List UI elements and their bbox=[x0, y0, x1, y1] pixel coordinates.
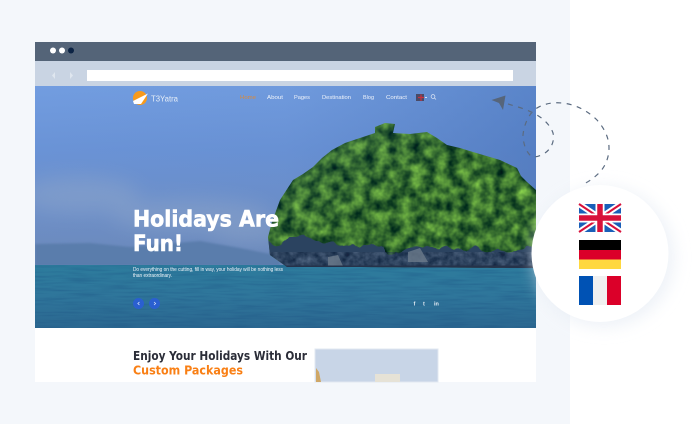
social icons: t bbox=[423, 302, 425, 308]
section heading: Custom Packages bbox=[133, 364, 243, 378]
island bbox=[268, 123, 536, 268]
browser window bbox=[20, 42, 540, 382]
flag: United Kingdom bbox=[579, 204, 621, 232]
nav links: Blog bbox=[363, 95, 374, 101]
social icons: f bbox=[414, 302, 416, 308]
paper plane icon bbox=[492, 96, 506, 110]
content section bbox=[35, 328, 536, 382]
social icons bbox=[414, 302, 439, 306]
browser address bar bbox=[35, 61, 536, 86]
nav links: Home bbox=[240, 95, 256, 101]
sea bbox=[35, 265, 536, 328]
section image bbox=[315, 349, 438, 382]
logo bbox=[133, 91, 179, 105]
dashed flight path bbox=[508, 103, 609, 185]
nav links: About bbox=[267, 95, 284, 101]
language circle bbox=[532, 185, 674, 327]
hero headline bbox=[134, 209, 278, 252]
browser title bar bbox=[35, 42, 536, 61]
nav links: Pages bbox=[294, 95, 310, 101]
distant hills bbox=[35, 241, 280, 266]
logo: T3Yatra bbox=[151, 94, 179, 104]
section heading: Enjoy Your Holidays With Our bbox=[133, 349, 307, 363]
section heading bbox=[133, 349, 307, 378]
flag: Germany bbox=[579, 240, 621, 269]
hero headline: Holidays Are bbox=[133, 208, 279, 232]
hero description bbox=[133, 267, 283, 279]
hero description: than extraordinary. bbox=[133, 273, 172, 279]
slider arrows bbox=[133, 298, 160, 309]
nav bar bbox=[133, 91, 436, 105]
hero description: Do everything on the cutting, fill in way, your holiday will be nothing less bbox=[133, 267, 283, 273]
nav links bbox=[240, 95, 407, 100]
nav flag and search bbox=[416, 94, 436, 101]
hero headline: Fun! bbox=[133, 232, 183, 257]
nav links: Contact bbox=[386, 95, 408, 101]
hero section bbox=[20, 86, 540, 328]
hero sky bbox=[35, 86, 536, 266]
social icons: in bbox=[434, 302, 440, 308]
nav links: Destination bbox=[322, 95, 351, 101]
clouds bbox=[35, 176, 272, 244]
flag: France bbox=[579, 276, 621, 305]
